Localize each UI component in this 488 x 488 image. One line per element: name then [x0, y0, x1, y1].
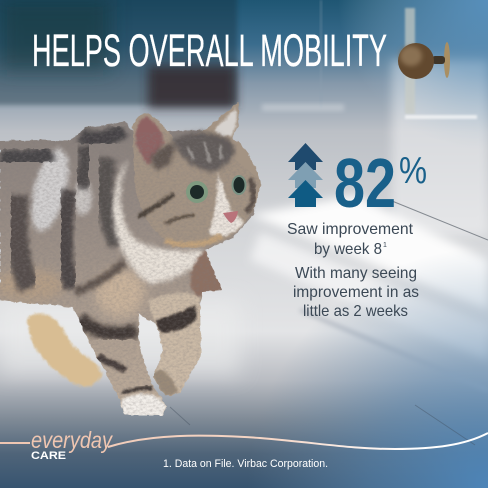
- wave line: [0, 433, 488, 449]
- text: many seeing improvement in 2 weeks: little as 2 weeks: [303, 303, 408, 320]
- stat: 82 percent: %: [399, 150, 427, 192]
- text: saw improvement by week 8: 1: [383, 242, 387, 249]
- text: saw improvement by week 8: [287, 221, 414, 258]
- photo: walking tabby cat: [0, 102, 262, 416]
- cat face details: [186, 175, 246, 223]
- text: many seeing improvement in 2 weeks: With many seeing: [295, 265, 417, 282]
- text: saw improvement by week 8: Saw improvement: [287, 221, 414, 238]
- icon: door knob: [398, 42, 450, 79]
- cat nose: [223, 211, 238, 223]
- far front leg: [148, 293, 203, 395]
- text: many seeing improvement in 2 weeks: improvement in as: [293, 284, 419, 301]
- logo: everyday care: CARE: [31, 450, 66, 462]
- logo: everyday care: [31, 427, 113, 462]
- text: many seeing improvement in 2 weeks: [293, 265, 419, 320]
- footnote: 1. Data on File. Virbac Corporation.: [163, 458, 328, 470]
- hind leg: [27, 313, 102, 387]
- fur texture: [0, 125, 258, 415]
- icon: three stacked up arrows: [288, 143, 323, 207]
- chest and ruff: [113, 160, 205, 284]
- text: saw improvement by week 8: by week 8: [314, 241, 382, 258]
- cat eyes: [186, 175, 246, 203]
- white paw: [122, 394, 167, 416]
- logo: everyday care: everyday: [31, 427, 113, 453]
- cat head: [133, 102, 260, 247]
- stat: 82 percent: 82: [334, 144, 396, 222]
